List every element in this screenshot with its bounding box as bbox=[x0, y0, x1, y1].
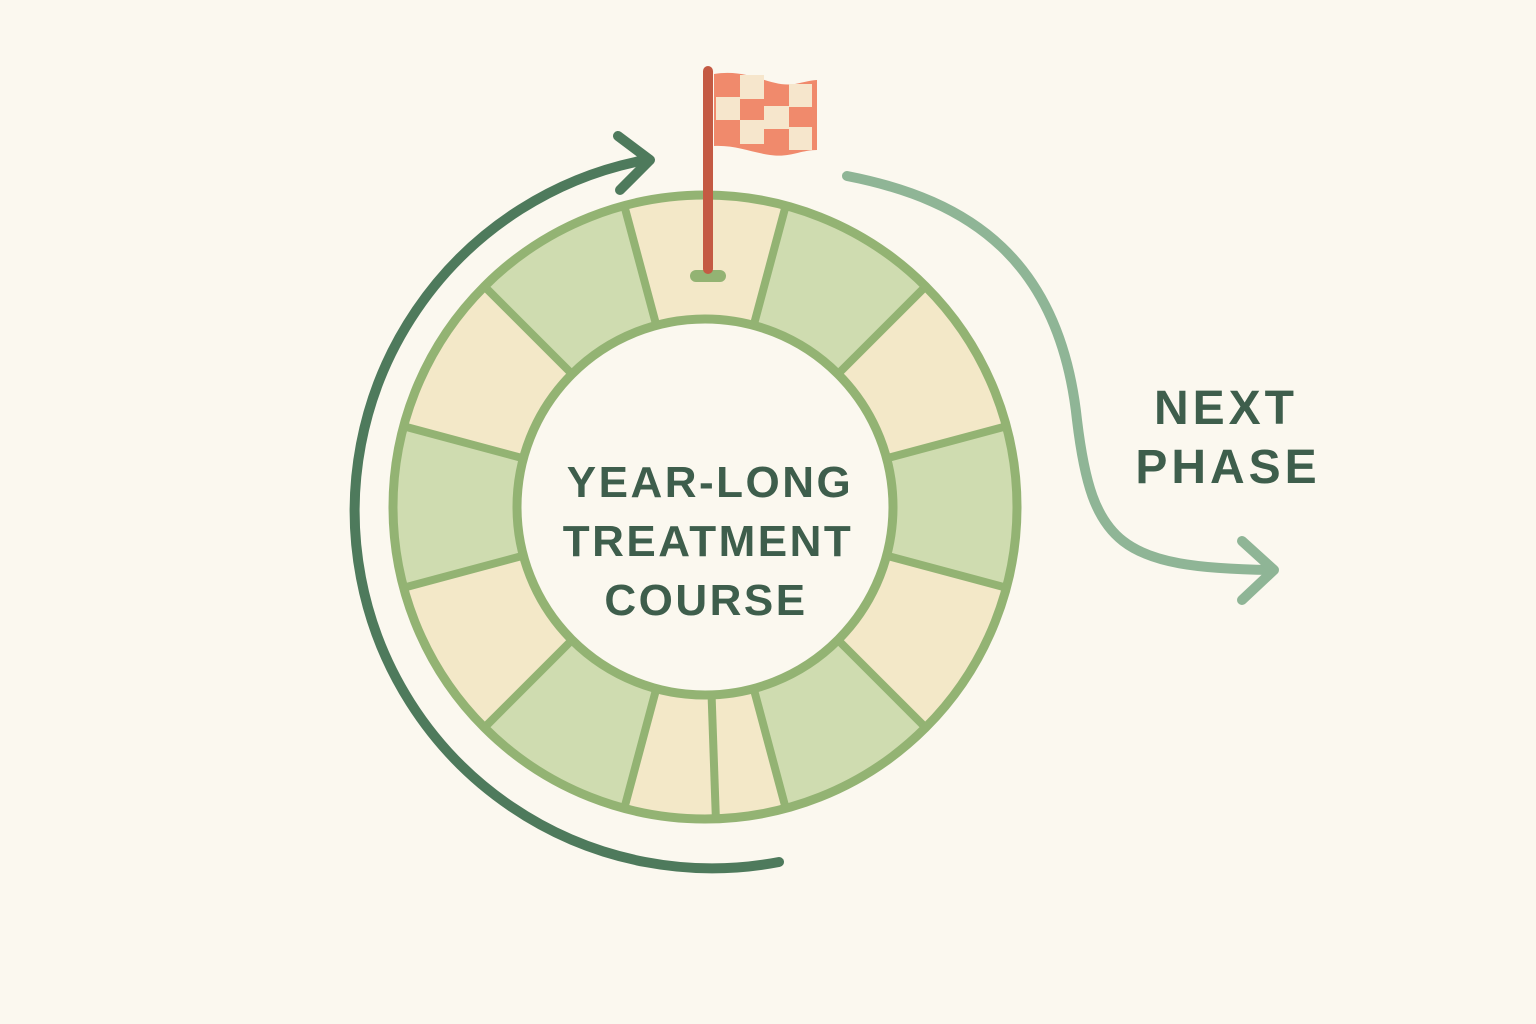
label: next phase: PHASE bbox=[1135, 441, 1321, 494]
center label: TREATMENT bbox=[563, 517, 853, 566]
wheel: twelve month segments bbox=[393, 195, 1017, 819]
center label bbox=[563, 458, 853, 625]
arrow: to next phase bbox=[847, 176, 1274, 600]
center label: YEAR-LONG bbox=[567, 458, 853, 507]
label: next phase: NEXT bbox=[1154, 382, 1298, 435]
flag: finish marker bbox=[690, 66, 817, 282]
center label: COURSE bbox=[604, 576, 808, 625]
arrow: left cycle arc bbox=[355, 136, 779, 868]
label: next phase bbox=[1135, 382, 1321, 494]
